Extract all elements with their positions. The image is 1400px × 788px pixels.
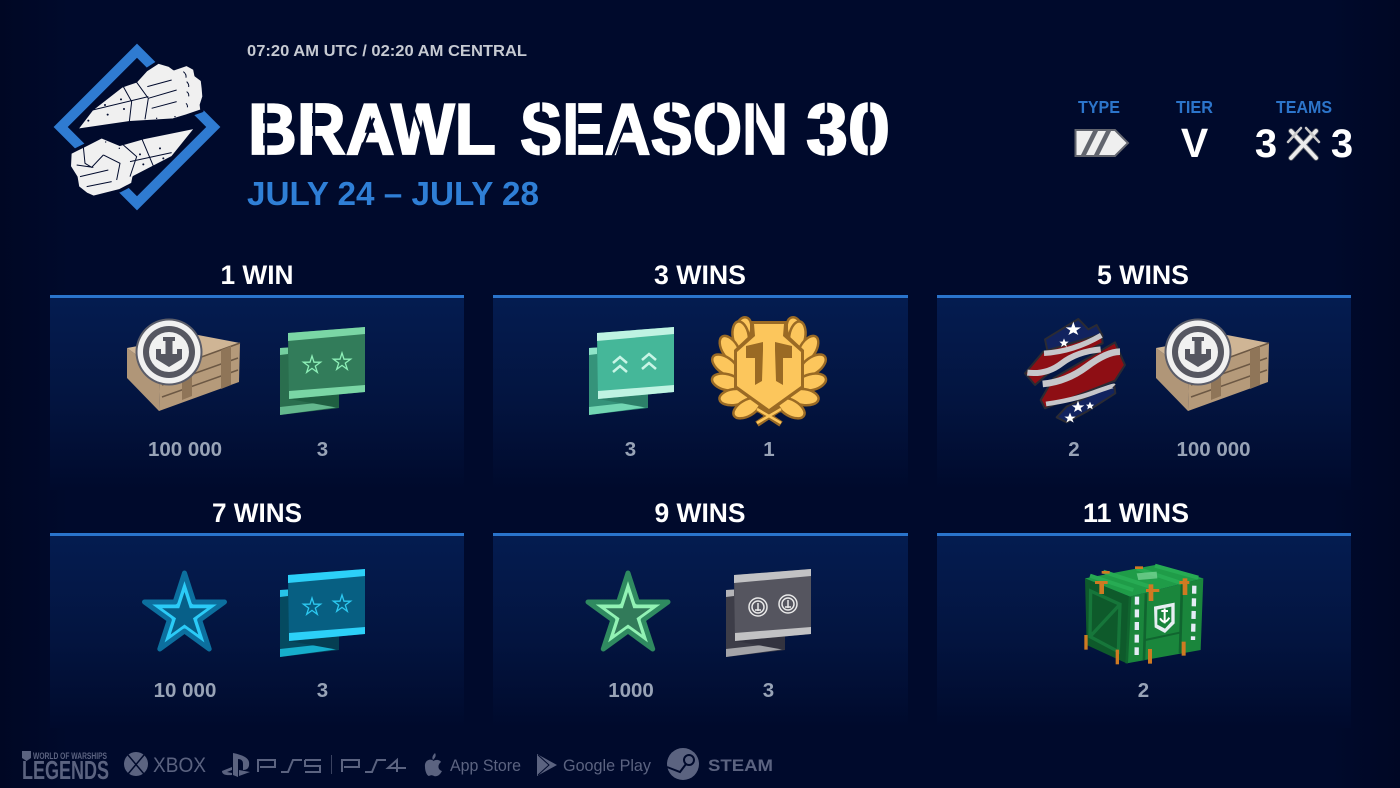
icon: blue star [144,573,224,649]
value: flags: 3 [763,679,774,702]
value: patches: 2 [1068,438,1080,461]
heading: 9 wins: 9 WINS [654,498,746,528]
logo: Google Play [537,754,651,776]
reward block: 7 wins [50,498,464,728]
heading: 11 wins: 11 WINS [1083,498,1189,528]
value: stars: 1000 [608,679,654,702]
reward block: 9 wins [493,498,908,728]
footer: platform logos [22,748,773,785]
icon: stars and stripes patch [1025,319,1125,423]
icon: teal chevron flag [589,327,674,415]
info: teams [1255,97,1353,166]
logo: Google Play: Google Play [563,756,651,775]
value: flags: 3 [317,438,328,461]
value: flags: 3 [625,438,636,461]
icon: green supply crate [1084,565,1203,664]
title [248,90,890,170]
logo: PlayStation 5 and 4 [222,753,406,777]
logo: World of Warships Legends [22,751,109,785]
logo: Steam: STEAM [708,756,773,775]
info: teams: 3 [1255,122,1277,166]
icon: type arrow [1076,130,1128,156]
heading: 5 wins: 5 WINS [1097,260,1189,290]
info: teams: 3 [1331,122,1353,166]
logo: App Store [425,753,521,776]
logo: crossed gauntlets in blue diamond [61,51,213,203]
logo: App Store: App Store [450,756,521,775]
value: credits: 100 000 [148,438,222,461]
icon: green star [588,573,668,649]
info: tier: TIER [1176,97,1213,117]
title: SEASON [520,90,788,170]
icon: gold laurel medal [708,315,830,424]
icon: grey coin flag [726,569,811,657]
heading: 1 win: 1 WIN [220,260,294,290]
heading: 3 wins: 3 WINS [654,260,746,290]
logo: World of Warships Legends: LEGENDS [22,755,109,785]
reward block: 3 wins [493,260,908,490]
value: supply crates: 2 [1138,679,1149,702]
heading: 7 wins: 7 WINS [212,498,302,528]
logo: World of Warships Legends: WORLD OF WARSHIPS [33,751,107,762]
value: credits: 100 000 [1176,438,1251,461]
info: type [1076,97,1128,156]
icon: credit crate [127,318,240,411]
value: medal: 1 [763,438,775,461]
reward block: 1 win [50,260,464,490]
logo: Xbox: XBOX [153,754,206,777]
date line: JULY 24 – JULY 28 [247,175,539,212]
logo: Steam [667,748,773,780]
logo: Xbox [124,752,206,777]
info: type: TYPE [1078,97,1120,117]
value: stars: 10 000 [154,679,216,702]
value: flags: 3 [317,679,328,702]
icon: blue star flag [280,569,365,657]
title: BRAWL [248,90,496,170]
icon: credit crate [1156,318,1269,411]
reward block: 11 wins [937,498,1351,728]
title: 30 [806,90,890,170]
info: tier: V [1181,120,1209,166]
info: tier [1176,97,1213,166]
info: teams: TEAMS [1276,97,1332,117]
icon: green star flag [280,327,365,415]
reward block: 5 wins [937,260,1351,490]
time line: 07:20 AM UTC / 02:20 AM CENTRAL [247,43,527,60]
icon: crossed swords [1288,128,1319,158]
